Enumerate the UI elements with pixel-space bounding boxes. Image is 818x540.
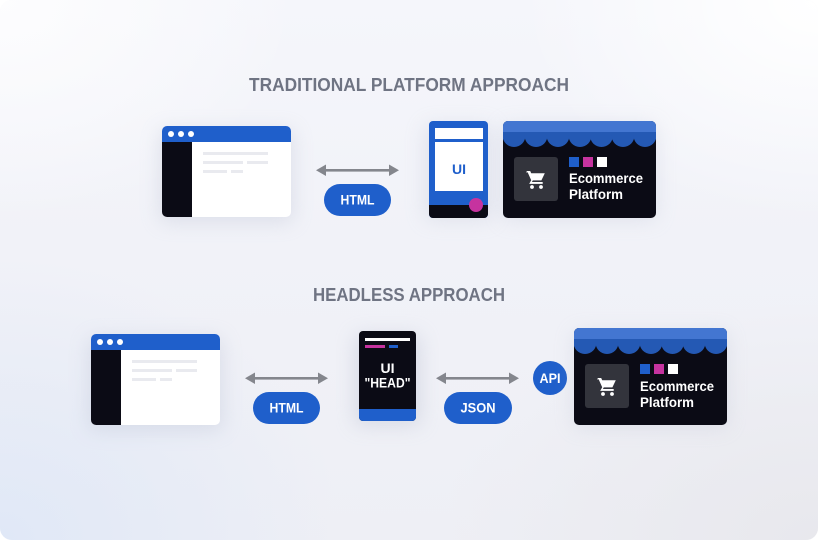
pill: HTML xyxy=(253,392,320,424)
pill: JSON xyxy=(444,392,512,424)
arrow: head to API xyxy=(436,372,519,384)
phone: UI xyxy=(425,121,492,220)
store: ecommerce platform headless: Platform xyxy=(640,395,694,410)
store: ecommerce platform headless: Ecommerce xyxy=(640,379,714,394)
heading: headless approach: HEADLESS APPROACH xyxy=(313,285,505,305)
badge: API: API xyxy=(540,371,560,386)
pill: HTML: HTML xyxy=(270,400,304,416)
browser window: headless xyxy=(89,334,222,430)
phone: UI: UI xyxy=(452,161,466,177)
store: ecommerce platform traditional: Platform xyxy=(569,187,623,202)
browser window: traditional xyxy=(160,126,293,222)
icon: cart xyxy=(597,378,616,396)
pill: JSON: JSON xyxy=(460,400,496,416)
phone: UI head xyxy=(355,331,420,425)
phone: UI head: UI xyxy=(380,360,394,376)
store: ecommerce platform traditional: Ecommerce xyxy=(569,171,643,186)
arrow: browser to UI xyxy=(316,164,399,176)
store: ecommerce platform traditional xyxy=(502,121,656,220)
store: ecommerce platform headless xyxy=(574,328,728,427)
heading: traditional platform approach: TRADITIONAL PLATFORM APPROACH xyxy=(249,75,569,95)
icon: cart xyxy=(526,171,545,189)
arrow: browser to head xyxy=(245,372,328,384)
pill: HTML: HTML xyxy=(340,192,375,208)
phone: UI head: "HEAD" xyxy=(364,374,410,390)
badge: API xyxy=(533,361,567,395)
pill: HTML xyxy=(324,184,391,216)
